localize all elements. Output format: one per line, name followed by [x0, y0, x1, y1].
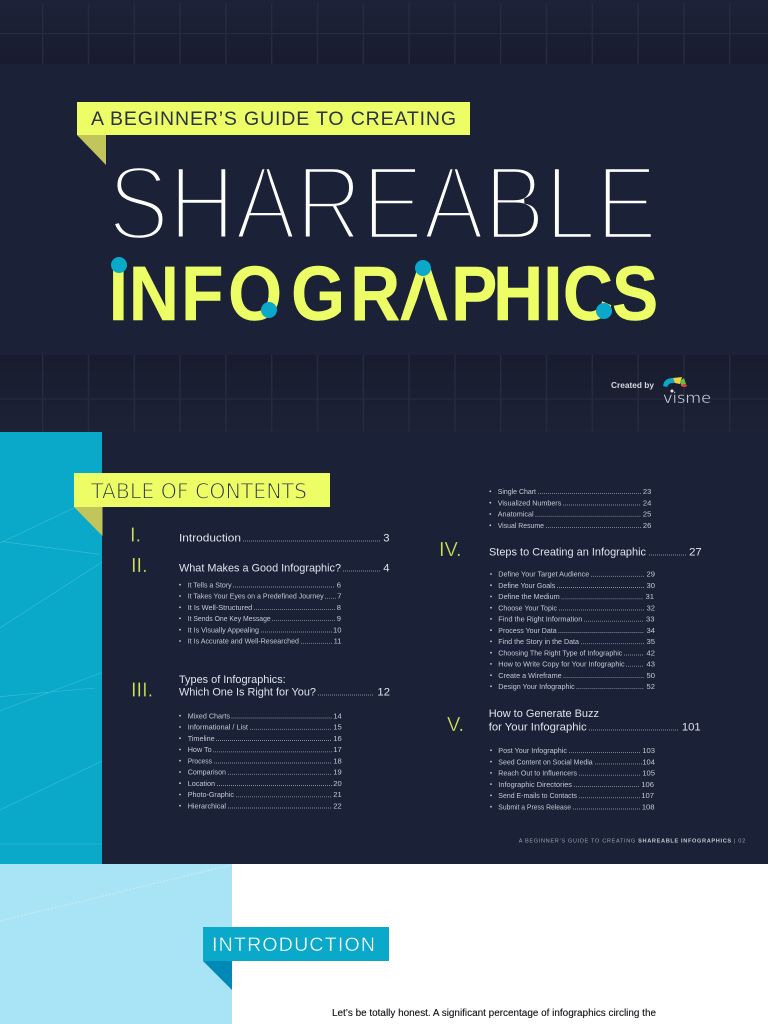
section III: types of infographics: 21 [333, 790, 342, 799]
section IV: steps to creating an infographic: Process Your Data [498, 626, 557, 635]
section III: types of infographics: 22 [333, 801, 342, 810]
section V: how to generate buzz: 101 [682, 721, 701, 733]
section III: types of infographics: 19 [333, 768, 342, 777]
section II: what makes a good infographic: 8 [337, 603, 341, 612]
section III: types of infographics: Which One Is Right for You? [179, 687, 316, 699]
section IV: steps to creating an infographic: 33 [646, 615, 654, 624]
section II: what makes a good infographic: It Takes Your Eyes on a Predefined Journey [188, 592, 324, 601]
section III continued: list items: 26 [643, 521, 651, 530]
section V: how to generate buzz [447, 708, 701, 811]
heading: steps to creating: Steps to Creating an Infographic [489, 546, 646, 558]
banner: table of contents [74, 473, 330, 536]
section II: what makes a good infographic: 4 [383, 563, 390, 575]
banner: introduction [203, 927, 389, 990]
section IV: steps to creating an infographic: Choose Your Topic [498, 603, 557, 612]
section II: what makes a good infographic: It Tells a Story [188, 580, 232, 589]
credit: created by visme: visme [663, 389, 711, 407]
numeral IV: IV. [439, 539, 462, 561]
footer: running title and page number: A BEGINNER’S GUIDE TO CREATING SHAREABLE INFOGRAPHICS | 02 [519, 838, 745, 844]
panel: top grid band [0, 0, 768, 64]
panel: bottom grid band [0, 355, 768, 432]
title: shareable: SHAREABLE [108, 144, 657, 262]
section III continued: list items [489, 487, 651, 530]
section V: how to generate buzz: Infographic Directories [498, 780, 572, 789]
section III continued: list items: 24 [643, 498, 651, 507]
heading: introduction: Introduction [179, 533, 241, 545]
section V: how to generate buzz: 105 [642, 769, 655, 778]
section III: types of infographics [131, 674, 390, 810]
section III: types of infographics: Process [188, 756, 212, 765]
panel: teal side strip [0, 432, 102, 864]
numeral V: V. [447, 714, 464, 736]
section V: how to generate buzz: 104 [642, 757, 655, 766]
banner: a beginner's guide: A BEGINNER’S GUIDE TO CREATING [91, 108, 456, 130]
text block: introduction body: Let’s be totally honest. A significant percentage of infographics circling the [332, 1008, 656, 1019]
section IV: steps to creating an infographic: 32 [647, 603, 655, 612]
section III: types of infographics: Timeline [188, 734, 215, 743]
section IV: steps to creating an infographic: 43 [647, 660, 655, 669]
section IV: steps to creating an infographic: Create a Wireframe [498, 671, 562, 680]
section II: what makes a good infographic: 6 [337, 580, 341, 589]
section IV: steps to creating an infographic: Define Your Target Audience [498, 570, 589, 579]
section III: types of infographics: 12 [377, 687, 390, 699]
section III continued: list items: Single Chart [498, 487, 537, 496]
section IV: steps to creating an infographic: Choosing The Right Type of Infographic [498, 648, 622, 657]
section III continued: list items: Anatomical [498, 510, 534, 519]
numeral II: II. [131, 555, 148, 577]
section IV: steps to creating an infographic: Find the Right Information [498, 615, 582, 624]
section V: how to generate buzz: 107 [641, 791, 654, 800]
banner: table of contents: TABLE OF CONTENTS [90, 480, 307, 504]
credit: created by visme [611, 377, 711, 407]
section IV: steps to creating an infographic: 31 [646, 592, 654, 601]
section IV: steps to creating an infographic: 34 [647, 626, 655, 635]
section III continued: list items: 25 [643, 510, 651, 519]
section III: types of infographics: 18 [333, 756, 342, 765]
section III: types of infographics: Mixed Charts [188, 711, 230, 720]
section III: types of infographics: Photo-Graphic [188, 790, 234, 799]
section III: types of infographics: Hierarchical [188, 801, 226, 810]
section IV: steps to creating an infographic: 29 [647, 570, 655, 579]
section IV: steps to creating an infographic: Define Your Goals [498, 581, 555, 590]
section III continued: list items: Visualized Numbers [498, 498, 561, 507]
section IV: steps to creating an infographic: 35 [647, 637, 655, 646]
section V: how to generate buzz: Seed Content on Social Media [498, 757, 593, 766]
banner: introduction: INTRODUCTION [212, 934, 375, 956]
section II: what makes a good infographic: It Sends One Key Message [188, 614, 271, 623]
section III: types of infographics: Location [188, 779, 215, 788]
panel: white page background [0, 864, 768, 1024]
numeral I: I. [130, 524, 141, 546]
credit: created by visme: Created by [611, 380, 654, 390]
section II: what makes a good infographic [131, 555, 390, 646]
section II: what makes a good infographic: 9 [337, 614, 341, 623]
section V: how to generate buzz: Send E-mails to Contacts [498, 791, 577, 800]
section IV: steps to creating an infographic: 42 [647, 648, 655, 657]
section II: what makes a good infographic: It Is Well-Structured [188, 603, 252, 612]
section III continued: list items: 23 [643, 487, 651, 496]
title: infographics: INFOGRAPHICS [109, 251, 658, 337]
section III: types of infographics: 16 [333, 734, 342, 743]
section III: types of infographics: 20 [333, 779, 342, 788]
numeral III: III. [131, 680, 153, 702]
banner: a beginner's guide [77, 102, 470, 165]
section V: how to generate buzz: 103 [642, 746, 655, 755]
section V: how to generate buzz: 108 [642, 802, 654, 811]
section III: types of infographics: 15 [333, 723, 342, 732]
section IV: steps to creating an infographic: Define the Medium [498, 592, 560, 601]
section V: how to generate buzz: 106 [641, 780, 654, 789]
section IV: steps to creating an infographic: How to Write Copy for Your Infographic [498, 660, 625, 669]
icon: visme logo [663, 377, 687, 392]
section IV: steps to creating an infographic: 50 [647, 671, 655, 680]
section I: introduction: 3 [383, 533, 390, 545]
section II: what makes a good infographic: It Is Accurate and Well-Researched [188, 637, 299, 646]
panel: light blue side strip [0, 864, 232, 1024]
section III: types of infographics: Informational / List [188, 723, 249, 732]
heading: types of infographics: Types of Infographics: [179, 674, 286, 686]
section III continued: list items: Visual Resume [498, 521, 544, 530]
section II: what makes a good infographic: 11 [334, 637, 342, 646]
section V: how to generate buzz: for Your Infographic [489, 721, 587, 733]
section II: what makes a good infographic: 7 [337, 592, 342, 601]
panel: table of contents background [0, 432, 768, 864]
section III: types of infographics: 14 [333, 711, 342, 720]
section IV: steps to creating an infographic: 30 [647, 581, 655, 590]
section V: how to generate buzz: Submit a Press Release [498, 802, 571, 811]
section V: how to generate buzz: Reach Out to Influencers [498, 769, 577, 778]
section III: types of infographics: 17 [333, 745, 342, 754]
section IV: steps to creating an infographic: Design Your Infographic [498, 682, 575, 691]
section V: how to generate buzz: Post Your Infographic [498, 746, 567, 755]
section IV: steps to creating an infographic: 52 [647, 682, 655, 691]
section IV: steps to creating an infographic: 27 [689, 546, 702, 558]
section IV: steps to creating an infographic [439, 539, 702, 691]
section IV: steps to creating an infographic: Find the Story in the Data [498, 637, 580, 646]
section II: what makes a good infographic: It Is Visually Appealing [188, 625, 259, 634]
section I: introduction [130, 524, 390, 546]
section III: types of infographics: How To [188, 745, 212, 754]
section II: what makes a good infographic: 10 [333, 625, 342, 634]
panel: cover background [0, 0, 768, 432]
heading: how to generate buzz: How to Generate Buzz [489, 708, 599, 720]
section III: types of infographics: Comparison [188, 768, 226, 777]
heading: what makes a good infographic: What Makes a Good Infographic? [179, 563, 341, 575]
